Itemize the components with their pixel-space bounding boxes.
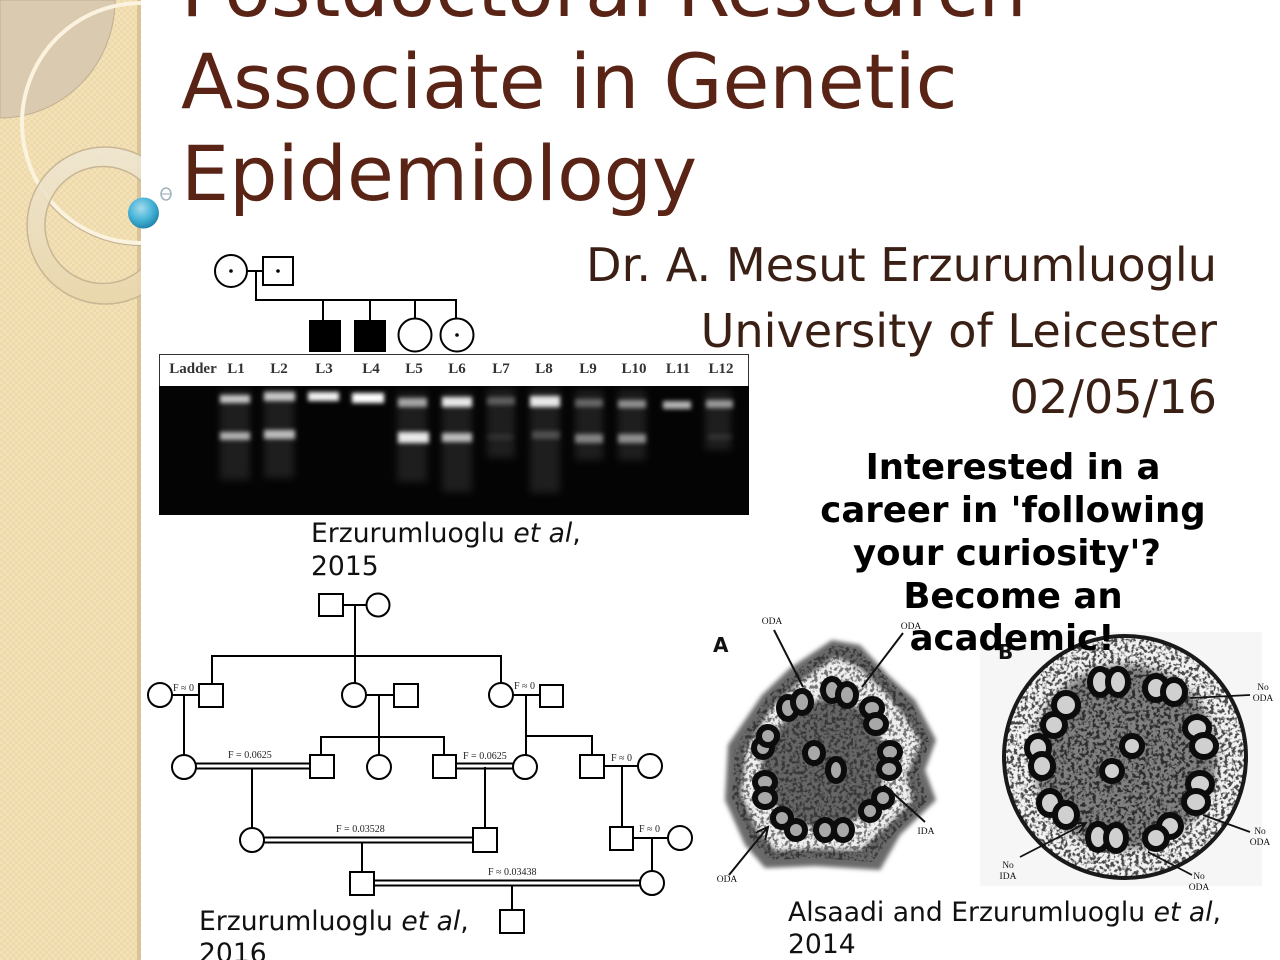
micrograph B: cilium without dynein arms: ODA: [1250, 838, 1270, 848]
micrograph B: cilium without dynein arms: No: [1254, 827, 1266, 837]
gel electrophoresis image: L8: [535, 361, 553, 377]
pedigree: family of gel: [215, 255, 474, 352]
micrograph B: cilium without dynein arms: IDA: [1000, 872, 1017, 882]
callout: career message: [820, 447, 1206, 659]
gel electrophoresis image: L7: [492, 361, 510, 377]
caption: micrograph citation: 2014: [788, 929, 856, 960]
micrograph A: cilium with outer dynein arms: [717, 617, 940, 885]
subtitle: author details: 02/05/16: [1010, 370, 1217, 424]
gel electrophoresis image: L4: [362, 361, 380, 377]
pedigree: consanguineous family: F ≈ 0.03438: [488, 867, 537, 878]
caption: micrograph citation: Alsaadi and Erzurumluoglu et al,: [788, 897, 1221, 928]
callout: career message: Become an: [903, 576, 1123, 617]
pedigree: consanguineous family: [148, 594, 692, 933]
subtitle: author details: Dr. A. Mesut Erzurumluoglu: [586, 238, 1217, 292]
subtitle: author details: [586, 238, 1217, 424]
micrograph B: cilium without dynein arms: [980, 632, 1273, 893]
panel labels A and B: [713, 633, 1013, 664]
micrograph A: cilium with outer dynein arms: IDA: [918, 827, 935, 837]
callout: career message: academic!: [910, 618, 1114, 659]
callout: career message: Interested in a: [866, 447, 1160, 488]
micrograph B: cilium without dynein arms: No: [1002, 861, 1014, 871]
pedigree: consanguineous family: F = 0.0625: [228, 750, 272, 761]
icon: blue sphere: [128, 188, 171, 228]
micrograph A: cilium with outer dynein arms: ODA: [717, 875, 737, 885]
gel electrophoresis image: L6: [448, 361, 466, 377]
gel electrophoresis image: L5: [405, 361, 423, 377]
title: Epidemiology: [181, 129, 697, 218]
caption: gel citation: Erzurumluoglu et al,: [311, 518, 581, 549]
pedigree: consanguineous family: F = 0.0625: [463, 751, 507, 762]
pedigree: consanguineous family: F ≈ 0: [611, 753, 632, 764]
caption: gel citation: 2015: [311, 551, 379, 582]
title: [181, 0, 1027, 218]
pedigree: consanguineous family: F ≈ 0: [639, 824, 660, 835]
gel electrophoresis image: L3: [315, 361, 333, 377]
title: Associate in Genetic: [181, 37, 958, 126]
gel electrophoresis image: L11: [666, 361, 690, 377]
gel electrophoresis image: L10: [621, 361, 647, 377]
subtitle: author details: University of Leicester: [701, 304, 1217, 358]
callout: career message: your curiosity'?: [853, 533, 1161, 574]
pedigree: consanguineous family: F ≈ 0: [173, 683, 194, 694]
gel electrophoresis image: L1: [227, 361, 245, 377]
left decorative panel: [0, 0, 141, 960]
callout: career message: career in 'following: [820, 490, 1206, 531]
panel labels A and B: A: [713, 633, 729, 657]
caption: pedigree citation: Erzurumluoglu et al,: [199, 906, 469, 937]
pedigree: consanguineous family: F ≈ 0: [514, 681, 535, 692]
micrograph B: cilium without dynein arms: No: [1193, 872, 1205, 882]
pedigree: consanguineous family: F = 0.03528: [336, 824, 385, 835]
gel electrophoresis image: L12: [708, 361, 734, 377]
micrograph A: cilium with outer dynein arms: ODA: [901, 622, 921, 632]
micrograph A: cilium with outer dynein arms: ODA: [762, 617, 782, 627]
gel electrophoresis image: L2: [270, 361, 288, 377]
gel electrophoresis image: L9: [579, 361, 597, 377]
micrograph B: cilium without dynein arms: ODA: [1189, 883, 1209, 893]
panel labels A and B: B: [998, 640, 1013, 664]
micrograph B: cilium without dynein arms: ODA: [1253, 694, 1273, 704]
gel electrophoresis image: Ladder: [169, 361, 217, 377]
gel electrophoresis image: [159, 354, 749, 515]
micrograph B: cilium without dynein arms: No: [1257, 683, 1269, 693]
